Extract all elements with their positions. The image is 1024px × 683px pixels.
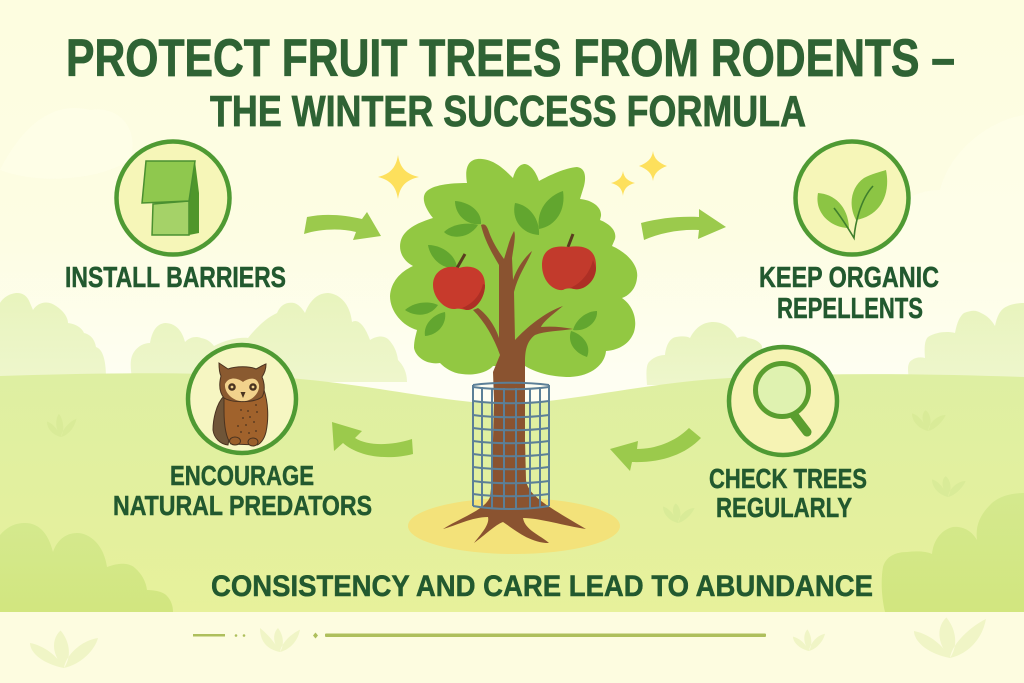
arrow: check trees to tree: [610, 428, 701, 471]
subtitle: THE WINTER SUCCESS FORMULA: [210, 87, 806, 136]
label: check trees regularly: [709, 463, 867, 523]
tagline: CONSISTENCY AND CARE LEAD TO ABUNDANCE: [211, 570, 873, 603]
bottom decorative line: [193, 632, 766, 638]
label: keep organic repellents: [759, 262, 939, 325]
sparkles: [378, 151, 667, 199]
hill ground: [0, 373, 1024, 612]
tree leaves: [405, 191, 597, 357]
arrow: barriers to tree: [304, 212, 381, 240]
bottom grass tufts: [30, 618, 986, 668]
icon: leaves: [796, 142, 908, 254]
tree crown: [390, 159, 637, 377]
label: check trees regularly: REGULARLY: [716, 492, 852, 523]
background bushes: [0, 293, 1024, 385]
label: encourage natural predators: [113, 460, 372, 521]
icon: owl: [188, 345, 296, 453]
right apple: [542, 234, 596, 290]
label: encourage natural predators: ENCOURAGE: [170, 460, 314, 491]
wire mesh cage: [473, 383, 549, 509]
label: encourage natural predators: NATURAL PREDATORS: [113, 490, 372, 521]
foreground bush right: [882, 493, 1024, 612]
tree: [390, 159, 637, 543]
label: keep organic repellents: REPELLENTS: [777, 293, 923, 325]
left apple: [433, 254, 485, 310]
faint background clouds: [0, 108, 1024, 300]
label: install barriers: INSTALL BARRIERS: [65, 262, 286, 294]
icon: magnifier: [729, 347, 837, 455]
ground shadow ellipse: [408, 498, 620, 554]
grass tufts on hill: [47, 410, 966, 523]
label: check trees regularly: CHECK TREES: [709, 463, 867, 494]
icon: barrier: [116, 142, 230, 254]
bottom strip: [0, 612, 1024, 683]
foreground bush left: [0, 523, 173, 612]
trunk and roots: [443, 224, 586, 543]
label: keep organic repellents: KEEP ORGANIC: [759, 262, 939, 294]
arrow: tree to repellents: [641, 209, 726, 240]
arrow: tree to predators: [332, 422, 413, 457]
